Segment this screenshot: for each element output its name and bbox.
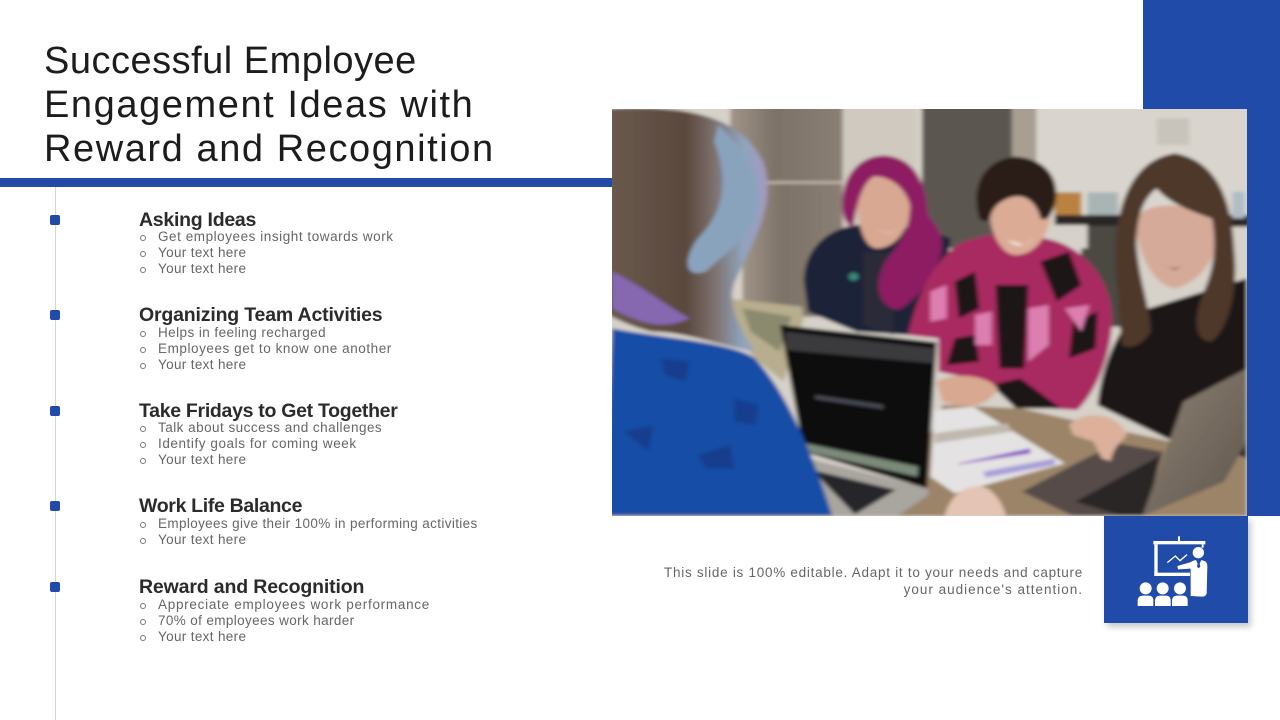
title: Reward and Recognition xyxy=(44,128,495,170)
caption text xyxy=(664,565,1083,597)
text block: Take Fridays to Get Together: Your text here xyxy=(158,452,246,467)
text block: Take Fridays to Get Together: Identify goals for coming week xyxy=(158,436,357,451)
title: Successful Employee xyxy=(44,40,417,82)
text block: Organizing Team Activities: Organizing Team Activities xyxy=(139,304,382,326)
front laptop xyxy=(808,458,928,516)
text block: Asking Ideas: Asking Ideas xyxy=(139,209,256,231)
text block: Organizing Team Activities: Helps in feeling recharged xyxy=(158,325,326,340)
title xyxy=(44,40,495,170)
text block: Asking Ideas: Get employees insight towards work xyxy=(158,229,394,244)
title: Engagement Ideas with xyxy=(44,84,474,126)
right laptop xyxy=(1022,443,1163,516)
text block: Take Fridays to Get Together: Talk about success and challenges xyxy=(158,420,382,435)
text block: Organizing Team Activities xyxy=(139,304,392,372)
timeline marker 1 xyxy=(50,215,60,225)
timeline line xyxy=(55,187,56,720)
icon panel: presenter with audience xyxy=(1104,516,1248,623)
text block: Work Life Balance xyxy=(139,495,478,547)
text block: Asking Ideas: Your text here xyxy=(158,261,246,276)
text block: Organizing Team Activities: Your text here xyxy=(158,357,246,372)
caption text: your audience's attention. xyxy=(904,582,1083,597)
text block: Work Life Balance: Your text here xyxy=(158,532,246,547)
timeline marker 5 xyxy=(50,582,60,592)
timeline marker 3 xyxy=(50,406,60,416)
timeline marker 4 xyxy=(50,501,60,511)
text block: Work Life Balance: Employees give their 100% in performing activities xyxy=(158,516,478,531)
woman with short dark hair xyxy=(908,235,1112,410)
text block: Reward and Recognition: Reward and Recognition xyxy=(139,576,364,598)
woman in blue back view xyxy=(604,328,832,516)
woman with long brown hair xyxy=(1098,278,1247,458)
notebook xyxy=(930,407,1065,493)
hand xyxy=(1069,415,1127,461)
text block: Reward and Recognition: Appreciate employees work performance xyxy=(158,597,430,612)
panel: blue background block xyxy=(1143,0,1280,516)
text block: Work Life Balance: Work Life Balance xyxy=(139,495,302,517)
text block: Reward and Recognition: 70% of employees work harder xyxy=(158,613,354,628)
title underline bar xyxy=(0,178,612,187)
caption text: This slide is 100% editable. Adapt it to your needs and capture xyxy=(664,565,1083,580)
woman with purple hair xyxy=(804,225,951,335)
photo: four colleagues at a table with laptops xyxy=(612,109,1247,516)
text block: Asking Ideas: Your text here xyxy=(158,245,246,260)
text block: Reward and Recognition: Your text here xyxy=(158,629,246,644)
magazine xyxy=(726,298,804,382)
text block: Asking Ideas xyxy=(139,209,394,276)
timeline marker 2 xyxy=(50,310,60,320)
text block: Reward and Recognition xyxy=(139,576,430,644)
table xyxy=(898,405,1247,516)
icon: presenter and audience xyxy=(1138,536,1208,606)
text block: Organizing Team Activities: Employees get to know one another xyxy=(158,341,392,356)
text block: Take Fridays to Get Together xyxy=(139,400,398,467)
text block: Take Fridays to Get Together: Take Fridays to Get Together xyxy=(139,400,398,422)
